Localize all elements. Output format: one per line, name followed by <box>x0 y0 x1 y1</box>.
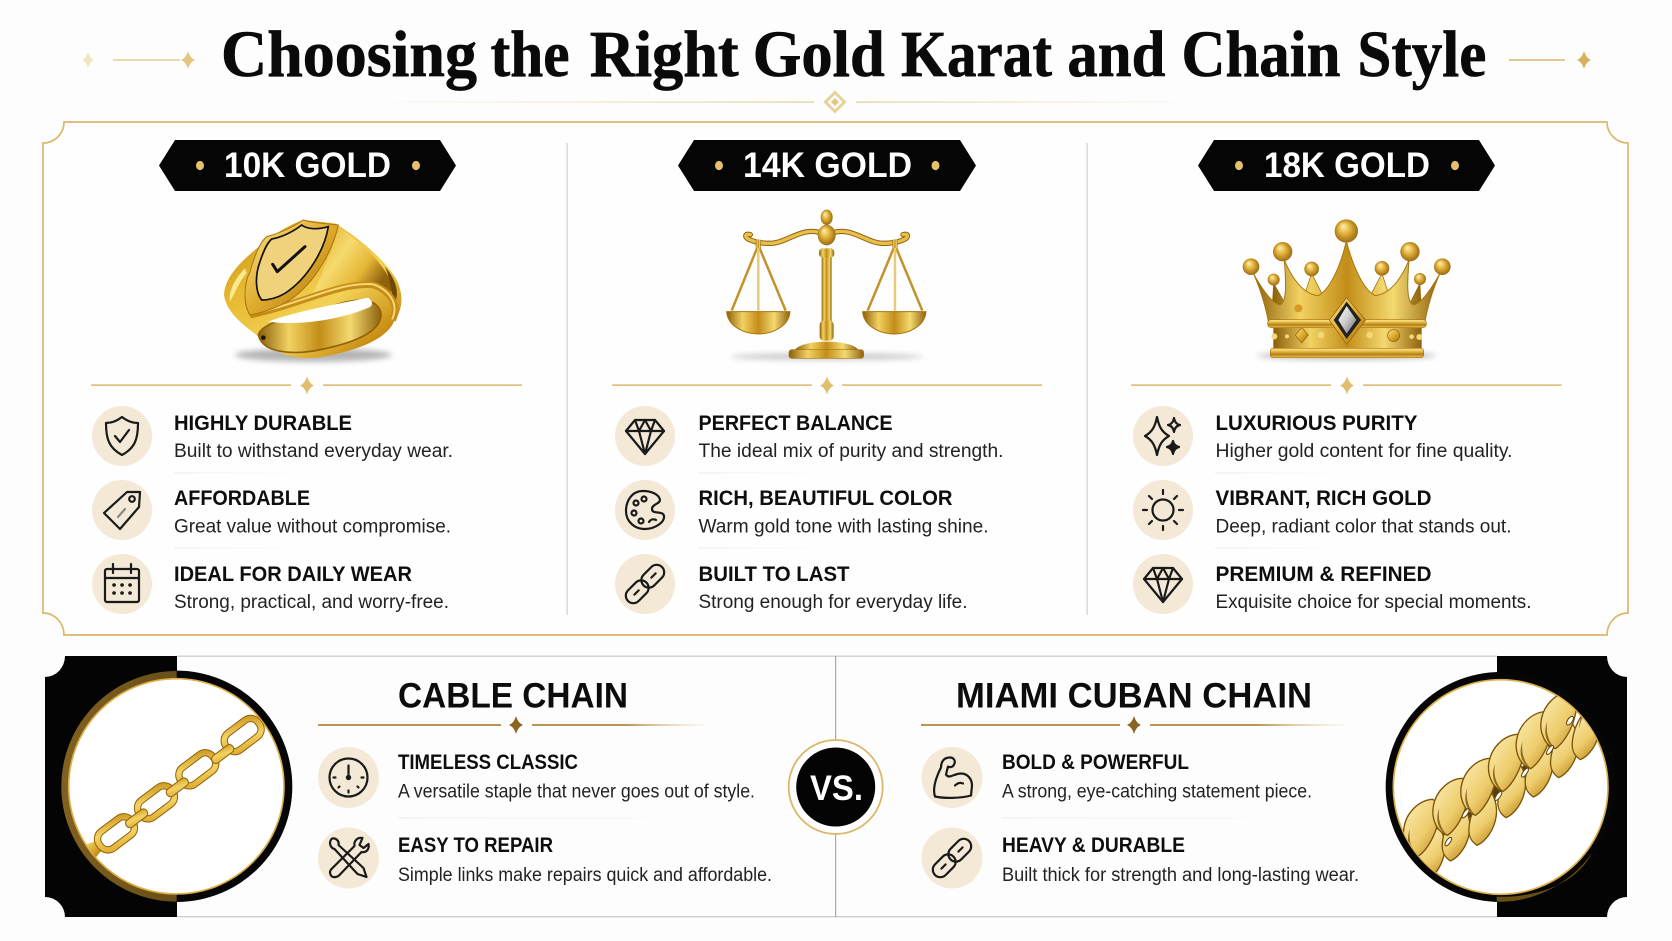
feature: ideal for daily wear: Strong, practical, and worry-free. <box>174 592 449 613</box>
title: Right <box>590 18 739 91</box>
icon: sun <box>1143 490 1183 530</box>
feature: luxurious purity: LUXURIOUS PURITY <box>1216 412 1418 435</box>
feature: built to last: Strong enough for everyday life. <box>698 592 968 613</box>
icon: diamond <box>626 420 664 454</box>
icon: gold balance scale <box>727 210 926 360</box>
left title ornament <box>82 51 195 69</box>
icon: wrench and screwdriver <box>330 838 369 877</box>
title: Gold <box>753 18 885 91</box>
feature: rich, beautiful color: RICH, BEAUTIFUL COLOR <box>698 487 952 510</box>
feature: rich, beautiful color <box>615 480 988 540</box>
badge: 10K gold: 10K GOLD <box>224 146 391 185</box>
feature: highly durable: Built to withstand everyday wear. <box>174 441 453 462</box>
icon: clock <box>330 758 368 796</box>
feature: heavy & durable: HEAVY & DURABLE <box>1002 834 1185 857</box>
icon: palette <box>626 491 664 529</box>
feature: bold & powerful: BOLD & POWERFUL <box>1002 751 1189 774</box>
feature: affordable: AFFORDABLE <box>174 487 310 510</box>
feature: easy to repair <box>318 828 772 888</box>
title: the <box>490 18 570 91</box>
title underline ornament <box>354 92 1206 112</box>
title: Karat <box>901 18 1052 91</box>
feature: timeless classic: TIMELESS CLASSIC <box>398 751 578 774</box>
feature: luxurious purity <box>1133 406 1512 466</box>
feature: premium & refined: PREMIUM & REFINED <box>1216 563 1432 586</box>
icon: price tag <box>104 492 140 529</box>
badge: 18K gold <box>1198 140 1495 191</box>
divider <box>1131 376 1562 394</box>
feature: built to last <box>615 554 968 614</box>
column: 10K gold <box>91 140 522 614</box>
badge: 18K gold: 18K GOLD <box>1264 146 1430 185</box>
black corner block: right <box>1497 656 1627 917</box>
divider <box>318 716 705 734</box>
divider <box>612 376 1042 394</box>
title: and <box>1067 18 1165 91</box>
icon: chain link <box>930 836 974 880</box>
icon: calendar <box>105 564 139 602</box>
icon: gold signet ring with shield <box>224 220 401 362</box>
title: Style <box>1357 18 1486 91</box>
badge: 14K gold: 14K GOLD <box>743 146 912 185</box>
feature: vibrant, rich gold <box>1133 480 1512 540</box>
feature: rich, beautiful color: Warm gold tone with lasting shine. <box>698 516 988 538</box>
panel: gold karats <box>43 122 1628 635</box>
icon: sparkles <box>1145 417 1180 455</box>
feature: ideal for daily wear <box>92 554 449 614</box>
divider <box>921 716 1345 734</box>
column: 18K gold <box>1131 140 1562 614</box>
panel: chain comparison <box>45 656 1627 917</box>
feature: premium & refined: Exquisite choice for special moments. <box>1216 592 1532 613</box>
feature: perfect balance <box>615 406 1004 466</box>
title: Choosing <box>221 18 477 91</box>
icon: shield <box>106 417 138 455</box>
feature: highly durable <box>92 406 453 466</box>
feature: bold & powerful: A strong, eye-catching statement piece. <box>1002 782 1312 802</box>
feature: ideal for daily wear: IDEAL FOR DAILY WEAR <box>174 563 412 586</box>
feature: timeless classic: A versatile staple that never goes out of style. <box>398 782 755 802</box>
icon: diamond <box>1144 568 1182 602</box>
VS badge: VS. <box>810 769 863 808</box>
panel frame <box>43 122 1628 635</box>
VS badge <box>789 740 883 834</box>
black corner block: left <box>45 656 177 917</box>
icon: flexed bicep <box>934 758 972 798</box>
feature: luxurious purity: Higher gold content for fine quality. <box>1216 441 1512 462</box>
feature: timeless classic <box>318 747 755 808</box>
column: Miami Cuban chain <box>921 676 1359 888</box>
feature: easy to repair: Simple links make repairs quick and affordable. <box>398 865 772 886</box>
feature: bold & powerful <box>922 747 1312 808</box>
feature: vibrant, rich gold: Deep, radiant color that stands out. <box>1216 516 1512 538</box>
icon: chain link <box>623 562 667 606</box>
heading: Miami Cuban chain: MIAMI CUBAN CHAIN <box>956 676 1312 716</box>
column: cable chain <box>318 676 772 888</box>
image: Miami Cuban chain medallion <box>1386 672 1616 902</box>
feature: highly durable: HIGHLY DURABLE <box>174 412 352 435</box>
feature: perfect balance: The ideal mix of purity and strength. <box>698 441 1004 462</box>
feature: affordable: Great value without compromise. <box>174 516 451 538</box>
feature: perfect balance: PERFECT BALANCE <box>698 412 892 435</box>
feature: easy to repair: EASY TO REPAIR <box>398 834 553 857</box>
feature: built to last: BUILT TO LAST <box>698 563 850 586</box>
heading: cable chain: CABLE CHAIN <box>398 676 628 716</box>
feature: vibrant, rich gold: VIBRANT, RICH GOLD <box>1216 487 1432 510</box>
feature: heavy & durable <box>922 828 1359 888</box>
badge: 10K gold <box>159 140 456 191</box>
icon: gold crown <box>1243 219 1451 360</box>
divider <box>91 376 522 394</box>
feature: heavy & durable: Built thick for strength and long-lasting wear. <box>1002 865 1359 886</box>
feature: premium & refined <box>1133 554 1532 614</box>
right title ornament <box>1509 51 1591 69</box>
feature: affordable <box>92 480 451 540</box>
badge: 14K gold <box>678 140 976 191</box>
title: Chain <box>1182 18 1340 91</box>
image: cable chain medallion <box>61 671 292 902</box>
column: 14K gold <box>612 140 1042 614</box>
